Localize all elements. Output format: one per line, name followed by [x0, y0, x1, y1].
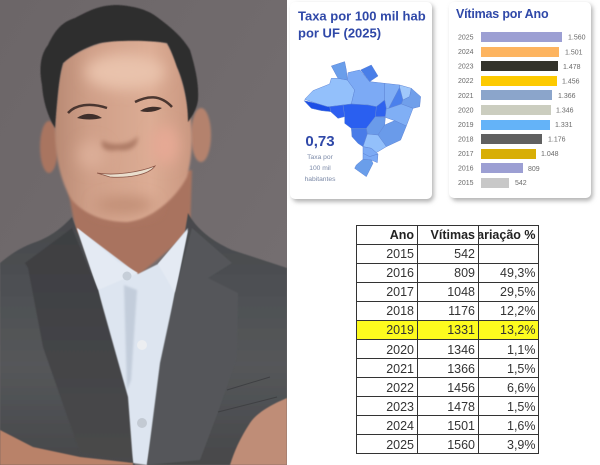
table header: Variação %	[469, 228, 536, 242]
bar chart: 2024	[458, 49, 474, 56]
jacket	[0, 213, 287, 465]
heading: taxa: Taxa por 100 mil hab	[298, 8, 426, 24]
table rows: 2016	[386, 266, 414, 280]
KPI value: 0,73	[305, 133, 335, 150]
shirt buttons	[122, 272, 147, 428]
table rows: 2018	[386, 304, 414, 318]
table rows: 1048	[447, 285, 475, 299]
right ear	[191, 108, 211, 162]
bar chart: 1.456	[562, 78, 580, 86]
bar chart: 1.560	[568, 34, 586, 42]
table rows: 809	[454, 266, 475, 280]
right hand and forearm	[230, 398, 287, 465]
bar chart: 542	[515, 180, 527, 187]
bar chart: 1.501	[565, 50, 583, 56]
table rows: 1560	[447, 438, 475, 452]
panel: vitimas por ano	[449, 2, 593, 201]
table header: Vítimas	[431, 228, 475, 242]
table rows: 2020	[386, 343, 414, 357]
table rows: 2019	[386, 323, 414, 337]
photo: man in suit with crossed arms	[0, 0, 287, 465]
bar chart: 1.478	[563, 64, 581, 71]
table rows	[386, 247, 536, 452]
table rows: 542	[454, 247, 475, 261]
bar chart: 2019	[458, 122, 474, 129]
table rows: 29,5%	[500, 285, 536, 299]
highlighted row 2019	[356, 320, 538, 339]
bar chart: 809	[528, 166, 540, 173]
bar chart: 2015	[458, 180, 474, 187]
bar chart: 2022	[458, 78, 474, 85]
KPI caption: 100 mil	[309, 165, 331, 172]
shirt	[77, 228, 188, 465]
table rows: 1346	[447, 343, 475, 357]
bar chart: 1.048	[541, 151, 559, 158]
table rows: 1501	[447, 419, 475, 433]
table rows: 1366	[447, 362, 475, 376]
bar chart: 2017	[458, 151, 474, 158]
collars	[77, 228, 188, 293]
KPI caption: habitantes	[305, 176, 336, 183]
table rows: 2021	[386, 362, 414, 376]
table rows: 1456	[447, 381, 475, 395]
KPI caption: Taxa por	[307, 154, 334, 161]
table rows: 6,6%	[507, 381, 536, 395]
bar chart: 2020	[458, 108, 474, 114]
neck	[68, 170, 192, 276]
heading: vitimas: Vítimas por Ano	[456, 7, 549, 21]
table rows: 1,6%	[507, 419, 536, 433]
panel: taxa por 100 mil hab por UF	[290, 2, 434, 202]
hair	[40, 5, 198, 128]
bar chart: 2025	[458, 34, 474, 42]
table rows: 2023	[386, 400, 414, 414]
table rows: 2025	[386, 438, 414, 452]
map of Brazil	[304, 62, 421, 177]
bar chart: 1.176	[548, 136, 566, 144]
bar chart: 2021	[458, 93, 474, 100]
eyebrows	[68, 97, 172, 113]
table rows: 2022	[386, 381, 414, 395]
mouth	[97, 166, 155, 177]
table: ano, vítimas, variação	[356, 225, 538, 454]
table rows: 3,9%	[507, 438, 536, 452]
right lapel	[147, 228, 238, 465]
bar chart: 1.366	[558, 93, 576, 100]
table rows: 1478	[447, 400, 475, 414]
bar chart: 2018	[458, 136, 474, 144]
table header	[390, 228, 536, 242]
table rows: 12,2%	[500, 304, 536, 318]
bar chart: 2016	[458, 166, 474, 172]
bar chart: 1.346	[556, 108, 574, 114]
panel: taxa por 100 mil hab por UF: por UF (2025)	[298, 26, 381, 40]
table rows: 2017	[386, 285, 414, 299]
table header: Ano	[390, 228, 414, 242]
table rows: 49,3%	[500, 266, 536, 280]
table rows: 1,5%	[507, 362, 536, 376]
bar chart: 2023	[458, 64, 474, 70]
eyes	[77, 107, 162, 120]
nose shadow	[102, 136, 138, 151]
table rows: 13,2%	[500, 323, 536, 337]
left lapel	[25, 228, 133, 463]
table rows: 1,1%	[507, 343, 536, 357]
table rows: 2024	[386, 419, 414, 433]
table rows: 1176	[448, 304, 475, 318]
table rows: 1,5%	[507, 400, 536, 414]
bar chart	[458, 32, 586, 188]
table rows: 1331	[447, 323, 475, 337]
face	[55, 39, 192, 222]
face highlights and shadows	[78, 54, 179, 213]
left ear	[40, 121, 58, 173]
shirt placket shadow	[124, 285, 137, 390]
table rows: 2015	[386, 247, 414, 261]
bar chart: 1.331	[555, 122, 573, 129]
left hand and forearm	[0, 430, 133, 465]
KPI caption	[305, 154, 336, 183]
pocket	[218, 377, 277, 412]
